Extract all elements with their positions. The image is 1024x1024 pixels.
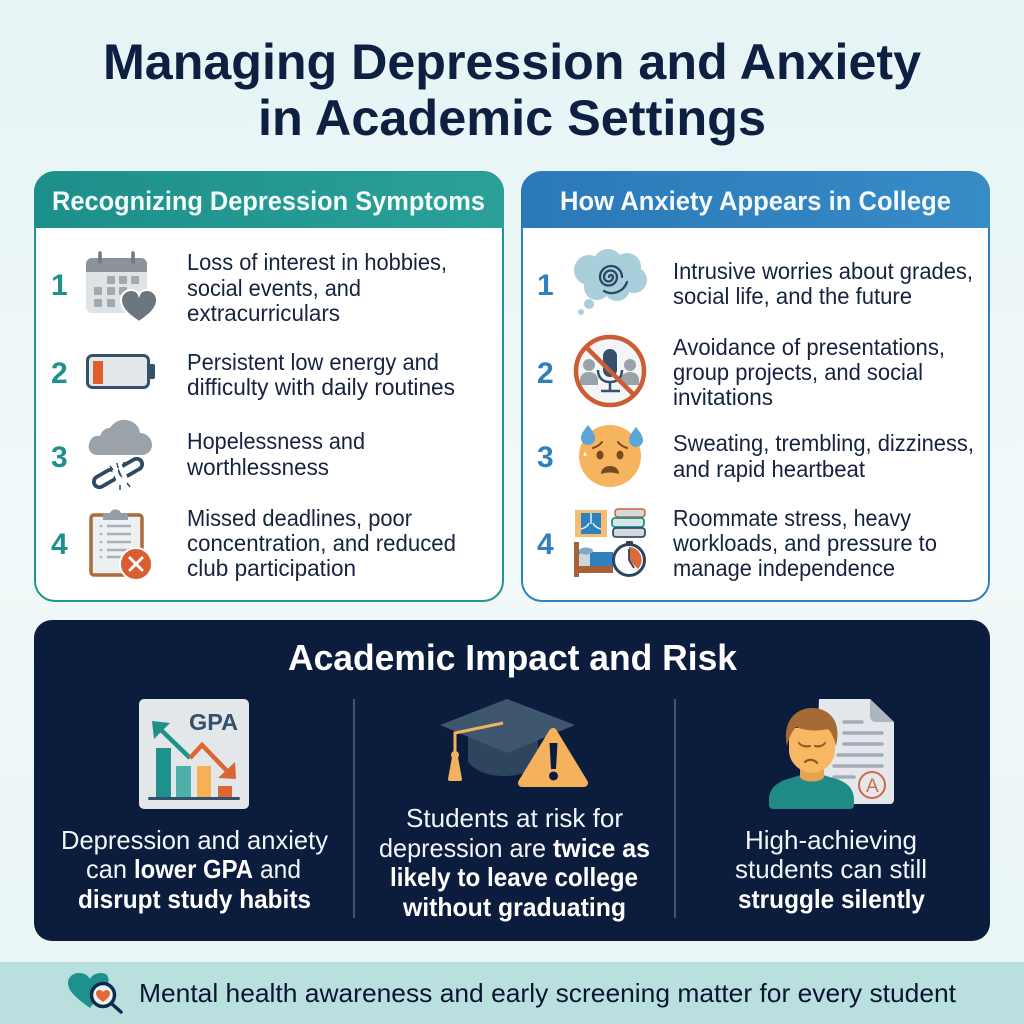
number 2: 2: [537, 357, 554, 390]
text: anxiety 1: social life, and the future: [673, 283, 912, 309]
text: GPA impact: [61, 825, 328, 914]
panel heading: how anxiety appears: [521, 172, 990, 228]
text: anxiety 4: manage independence: [673, 555, 895, 581]
panel heading: recognizing depression symptoms: [34, 172, 504, 228]
text: symptom 3: worthlessness: [186, 454, 329, 480]
text: symptom 1: Loss of interest in hobbies,: [187, 249, 447, 275]
text: symptom 4: [187, 505, 456, 581]
icon: sad student with A-graded paper: A: [866, 776, 879, 797]
icon: heart under magnifying glass: [68, 973, 121, 1012]
title: Managing Depression and Anxiety: [103, 34, 921, 90]
text: anxiety 2: group projects, and social: [673, 359, 923, 385]
icon: no microphone or people: [576, 337, 644, 405]
text: symptom 1: extracurriculars: [187, 300, 340, 326]
text: GPA impact: and: [260, 854, 301, 884]
footer message: Mental health awareness and early screening matter for every student: [139, 978, 957, 1008]
number 1: 1: [51, 269, 68, 302]
panel heading: how anxiety appears: How Anxiety Appears in College: [560, 186, 951, 216]
text: symptom 4: concentration, and reduced: [187, 530, 456, 556]
icon: graduation cap with warning: [440, 699, 584, 783]
text: symptom 3: Hopelessness and: [187, 428, 365, 454]
text: anxiety 2: [673, 334, 945, 410]
panel: anxiety in college: [521, 172, 990, 601]
icon: GPA falling chart: GPA: [189, 709, 238, 735]
text: symptom 4: Missed deadlines, poor: [187, 505, 412, 531]
icon: room, books, bed and stopwatch: [574, 509, 645, 577]
number 1: 1: [537, 269, 554, 302]
number 4: 4: [537, 528, 554, 561]
text: anxiety 3: and rapid heartbeat: [673, 456, 866, 482]
text: symptom 3: [186, 428, 365, 480]
panel: academic impact and risk: [34, 620, 990, 941]
text: symptom 2: difficulty with daily routines: [187, 374, 455, 400]
text: anxiety 4: [672, 505, 937, 581]
text: college risk: without graduating: [402, 892, 626, 922]
text: symptom 1: [187, 249, 447, 326]
text: anxiety 1: [673, 258, 973, 309]
text: anxiety 2: invitations: [673, 384, 773, 410]
number 2: 2: [51, 357, 68, 390]
number 3: 3: [51, 441, 68, 474]
text: symptom 2: [187, 349, 455, 400]
text: anxiety 2: Avoidance of presentations,: [673, 334, 945, 360]
title: in Academic Settings: [258, 90, 766, 146]
text: GPA impact: disrupt study habits: [78, 884, 311, 914]
text: symptom 1: social events, and: [187, 275, 361, 301]
text: college risk: [379, 803, 650, 922]
icon: sad student with A-graded paper: [769, 699, 894, 809]
text: GPA impact: Depression and anxiety: [61, 825, 328, 855]
panel heading: recognizing depression symptoms: Recognizing Depression Symptoms: [52, 186, 485, 216]
text: anxiety 1: Intrusive worries about grades,: [673, 258, 973, 284]
text: high achievers: struggle silently: [738, 884, 925, 914]
icon: sweating worried face: [579, 425, 643, 487]
number 3: 3: [537, 441, 554, 474]
title: [103, 34, 921, 146]
number 4: 4: [51, 528, 68, 561]
text: symptom 2: Persistent low energy and: [187, 349, 439, 375]
text: college risk: depression are: [379, 833, 546, 863]
icon: clipboard with x: [91, 509, 152, 580]
text: GPA impact: lower GPA: [134, 854, 253, 884]
icon: low battery: [88, 356, 155, 388]
text: high achievers: [735, 825, 927, 914]
icon: calendar with heart: [86, 253, 157, 322]
text: high achievers: High-achieving: [745, 825, 917, 855]
text: anxiety 4: workloads, and pressure to: [672, 530, 937, 556]
text: college risk: Students at risk for: [406, 803, 623, 833]
text: college risk: twice as: [553, 833, 650, 863]
panel: depression symptoms: [34, 172, 504, 601]
text: anxiety 3: [673, 430, 974, 482]
text: GPA impact: can: [86, 854, 127, 884]
text: anxiety 4: Roommate stress, heavy: [673, 505, 911, 531]
heading: academic impact and risk: Academic Impact and Risk: [288, 637, 738, 678]
icon: thought cloud with spiral: [574, 249, 647, 315]
text: high achievers: students can still: [735, 854, 927, 884]
icon: cloud and broken chain: [89, 420, 152, 490]
icon: GPA falling chart: [139, 699, 249, 809]
text: college risk: likely to leave college: [390, 862, 638, 892]
footer banner: [0, 962, 1024, 1024]
text: anxiety 3: Sweating, trembling, dizziness,: [673, 430, 974, 456]
text: symptom 4: club participation: [187, 555, 356, 581]
